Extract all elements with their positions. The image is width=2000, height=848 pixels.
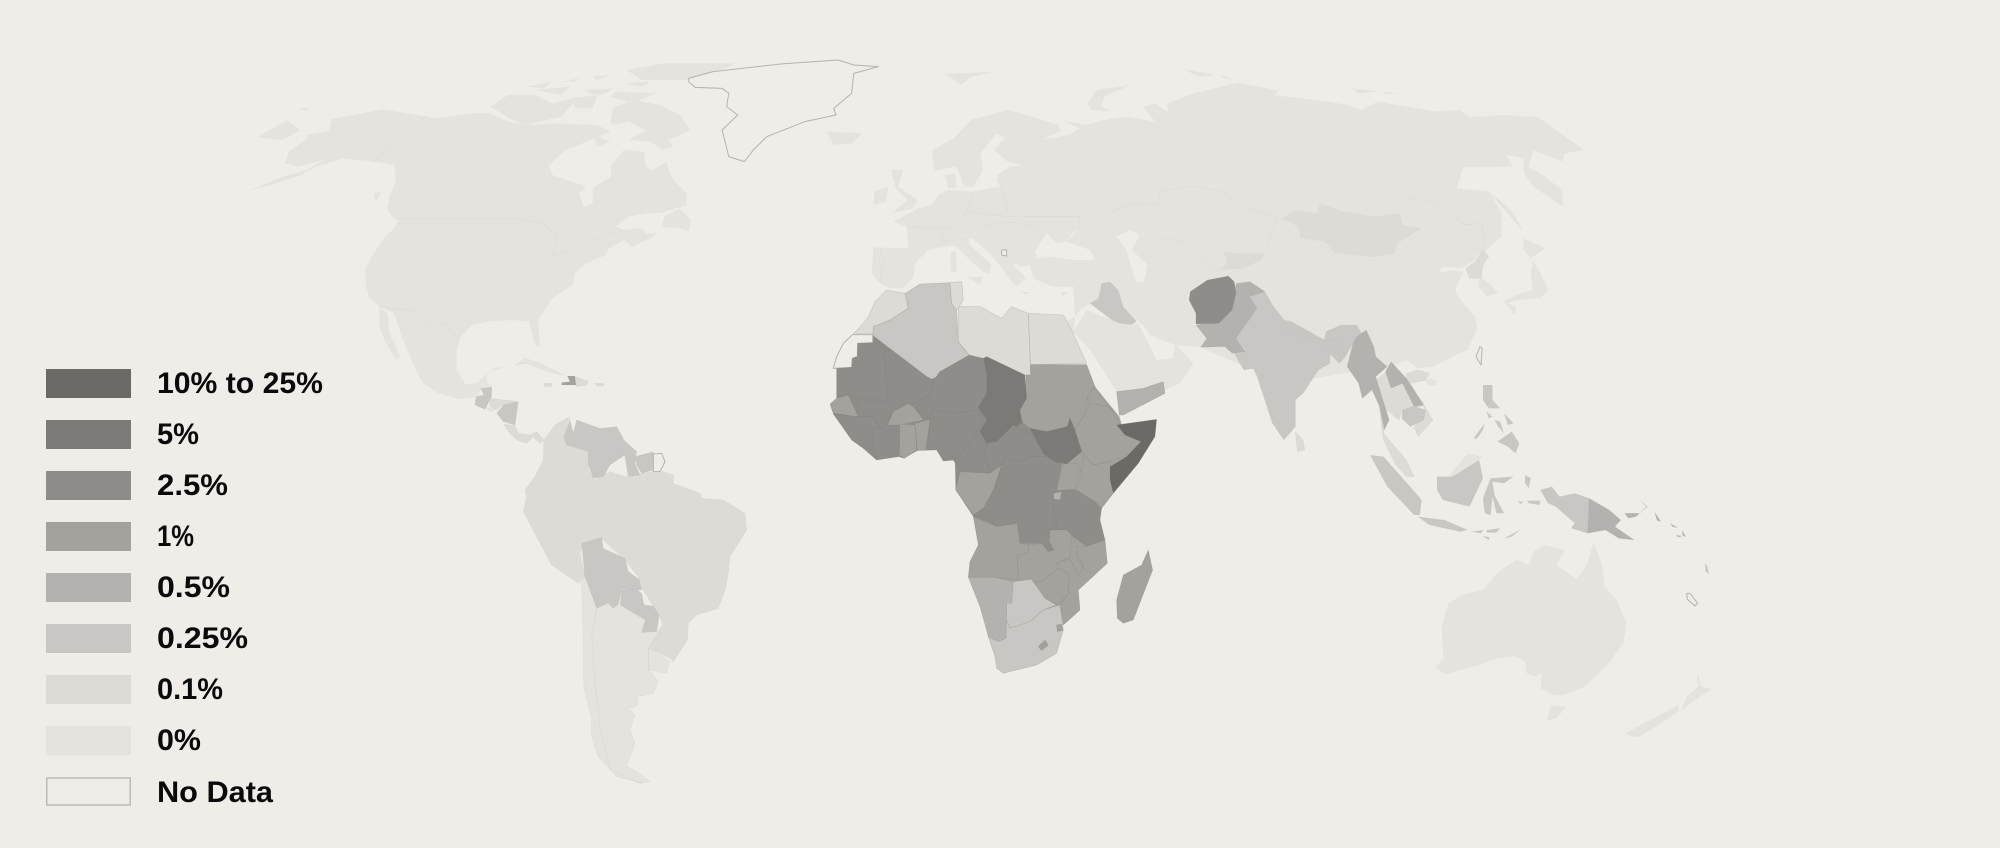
- country: Democratic Republic of Congo: [973, 457, 1062, 552]
- legend item: 1%: [46, 520, 194, 553]
- region: Africa and Arabia: [830, 282, 1193, 673]
- legend item: 10% to 25%: 10% to 25%: [157, 367, 323, 400]
- region: Australia and New Zealand: [1436, 543, 1712, 737]
- region: South Asia, China and Southeast Asia: [1137, 250, 1686, 540]
- country: Pakistan: [1196, 282, 1265, 353]
- legend item: No Data: [47, 776, 273, 809]
- country: Iraq: [1090, 282, 1137, 326]
- underlay: West and Central Africa: [830, 336, 1067, 543]
- country: French Guiana (no data): [653, 453, 665, 472]
- legend item: 5%: 5%: [157, 418, 199, 451]
- legend item: 1%: 1%: [157, 520, 194, 553]
- legend item: 0.5%: [46, 571, 230, 604]
- country: India: [1234, 292, 1362, 440]
- legend item: 0.1%: 0.1%: [157, 673, 223, 706]
- country: Yemen: [1117, 382, 1165, 415]
- region: Russia, Scandinavia and northern Asia: [874, 69, 1584, 340]
- country: Greenland (no data): [689, 60, 878, 162]
- legend item: 2.5%: [46, 469, 228, 502]
- region: Central and South America: [475, 358, 747, 783]
- country: Saudi Arabia and Gulf states: [1073, 310, 1193, 392]
- legend item: 0%: 0%: [157, 724, 201, 757]
- region: Europe, Turkey and the Middle East: [872, 170, 1160, 340]
- legend item: 10% to 25%: [46, 367, 323, 400]
- country: Cambodia: [1402, 406, 1426, 427]
- legend: [46, 367, 323, 809]
- country: Afghanistan: [1189, 276, 1236, 324]
- legend item: 0.25%: 0.25%: [157, 622, 248, 655]
- world map: [249, 60, 1712, 783]
- legend item: 0.1%: [46, 673, 223, 706]
- sea: Caspian Sea: [1117, 230, 1153, 283]
- underlay: East and Southern Africa: [968, 365, 1141, 625]
- legend item: 0.25%: [46, 622, 248, 655]
- legend item: 0.5%: 0.5%: [157, 571, 230, 604]
- country: Vietnam: [1406, 370, 1433, 437]
- country: Mongolia: [1109, 186, 1485, 273]
- legend item: No Data: No Data: [157, 776, 273, 809]
- country: Papua New Guinea: [1587, 498, 1634, 540]
- sea: Black Sea: [1035, 229, 1095, 260]
- country: North Korea: [1466, 250, 1489, 278]
- country: Thailand: [1376, 370, 1424, 477]
- legend item: 5%: [46, 418, 199, 451]
- country: Somalia: [1110, 419, 1157, 493]
- country: Kosovo: [1002, 250, 1007, 256]
- country: Chad: [978, 357, 1027, 443]
- country: Madagascar: [1117, 550, 1153, 623]
- legend item: 2.5%: 2.5%: [157, 469, 228, 502]
- region: North America: [249, 60, 878, 399]
- country: Myanmar: [1347, 330, 1389, 430]
- country: Laos: [1385, 362, 1424, 407]
- country: South Sudan: [1030, 418, 1082, 464]
- legend item: 0%: [46, 724, 201, 757]
